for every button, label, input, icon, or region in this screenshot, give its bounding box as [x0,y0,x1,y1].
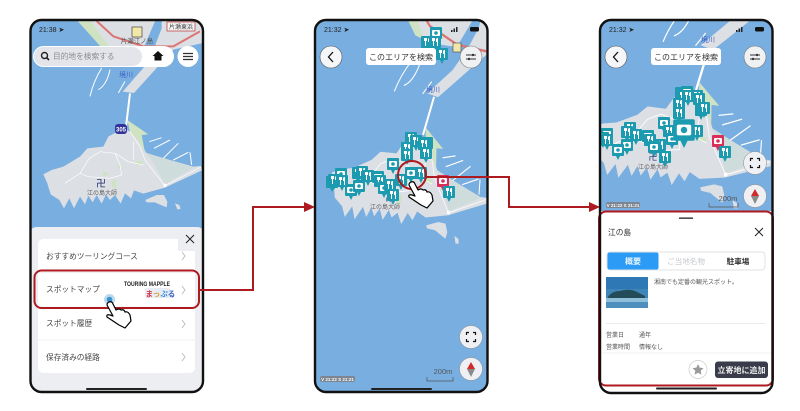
status bar [609,27,764,34]
filter button [744,46,766,68]
phone 1 map [32,21,202,230]
close button [178,230,203,251]
back button [605,46,627,68]
search this area button [651,48,721,65]
hours info: 通年 [639,331,651,339]
phone 1 map: 片瀬東浜 [169,23,193,31]
hand icon [409,182,433,208]
compass button [460,358,482,380]
fullscreen button [460,326,482,348]
close icon [755,228,763,236]
phone 2 map: 卍 [385,193,395,203]
arrow: map to detail [426,177,600,212]
selected camera pin [673,119,695,148]
bottom menu sheet [30,227,203,392]
highlight circle [398,161,426,189]
add stopover button: 立寄地に追加 [718,365,766,375]
hours info: 営業日 [606,331,624,339]
menu row labels: スポット履歴 [46,319,92,328]
favorite star button [689,360,707,378]
status bar [324,27,479,34]
tabs: ご当地名物 [667,256,705,266]
phone 1 map: 卍 [96,178,106,190]
scale bar [427,367,453,381]
compass button [744,184,766,208]
detail sheet [600,211,772,393]
search bar [33,46,174,67]
phone 2 map: 境川 [426,85,440,94]
highlight box: spot map row [34,270,199,308]
hours info: 営業時間 [606,343,630,351]
phone 1 map: 境川 [119,70,133,79]
hours info [606,331,663,351]
arrow: menu to map [199,202,315,290]
sheet title: 江の島 [608,227,631,237]
hours info: 情報なし [639,343,663,351]
add stopover button [715,362,768,378]
phone 2: map with spots [314,18,489,394]
search this area button: このエリアを検索 [654,52,718,62]
scale bar: 200m [719,194,737,203]
sheet handle [679,218,693,219]
phone 3 map: 江の島大師 [638,163,668,171]
menu row labels: おすすめツーリングコース [46,251,138,261]
tabs: 概要 [625,256,641,266]
phone frame [600,20,772,393]
search bar: 目的地を検索する [53,51,115,61]
home indicator [371,388,432,390]
menu button [178,46,198,67]
home indicator [86,388,147,390]
description text: 湘南でも定番の観光スポット。 [654,278,738,286]
menu row chevrons [182,252,185,361]
phone 3 map: 卍 [648,152,658,162]
menu row labels: 保存済みの経路 [46,352,100,362]
search this area button [366,48,436,65]
back button [320,46,342,68]
phone 3: spot detail [598,18,774,394]
highlight box: detail sheet [599,212,773,386]
status bar time: 21:38 ➤ [39,27,64,34]
phone frame [315,20,488,392]
phone 3 map [601,21,772,211]
logo: touring mapple [124,281,175,298]
scale bar [709,194,738,207]
search this area button: このエリアを検索 [369,52,433,62]
phone 2 map [316,21,486,391]
filter button [460,46,482,68]
tabs [607,252,765,270]
phone 1 map: 片瀬江ノ島 [121,36,154,45]
phone 2 map: 江の島大師 [370,203,400,211]
phone frame [30,20,203,392]
tap indicator and hand icon [104,294,131,328]
home indicator [656,388,717,390]
menu card [38,239,195,373]
phone 1 map: 江の島大師 [87,189,117,197]
phone 1 map: 305 [116,128,127,134]
logo: touring mapple: まっぷる [146,290,175,298]
logo: touring mapple: TOURING MAPPLE [124,281,171,288]
menu row labels [46,251,138,362]
phone 1: menu screen [30,15,217,393]
fullscreen button [744,152,766,174]
status bar: 21:32 ➤ [609,27,634,34]
phone 3 map: 境川 [701,35,715,44]
photo: enoshima [606,277,648,308]
version label: V 21:22 S 21:21 [321,377,354,382]
version label: V 21:22 S 21:21 [607,203,640,208]
scale bar: 200m [434,367,452,376]
status bar: 21:32 ➤ [324,27,349,34]
tabs: 駐車場 [727,256,750,266]
menu row labels: スポットマップ [46,285,100,294]
